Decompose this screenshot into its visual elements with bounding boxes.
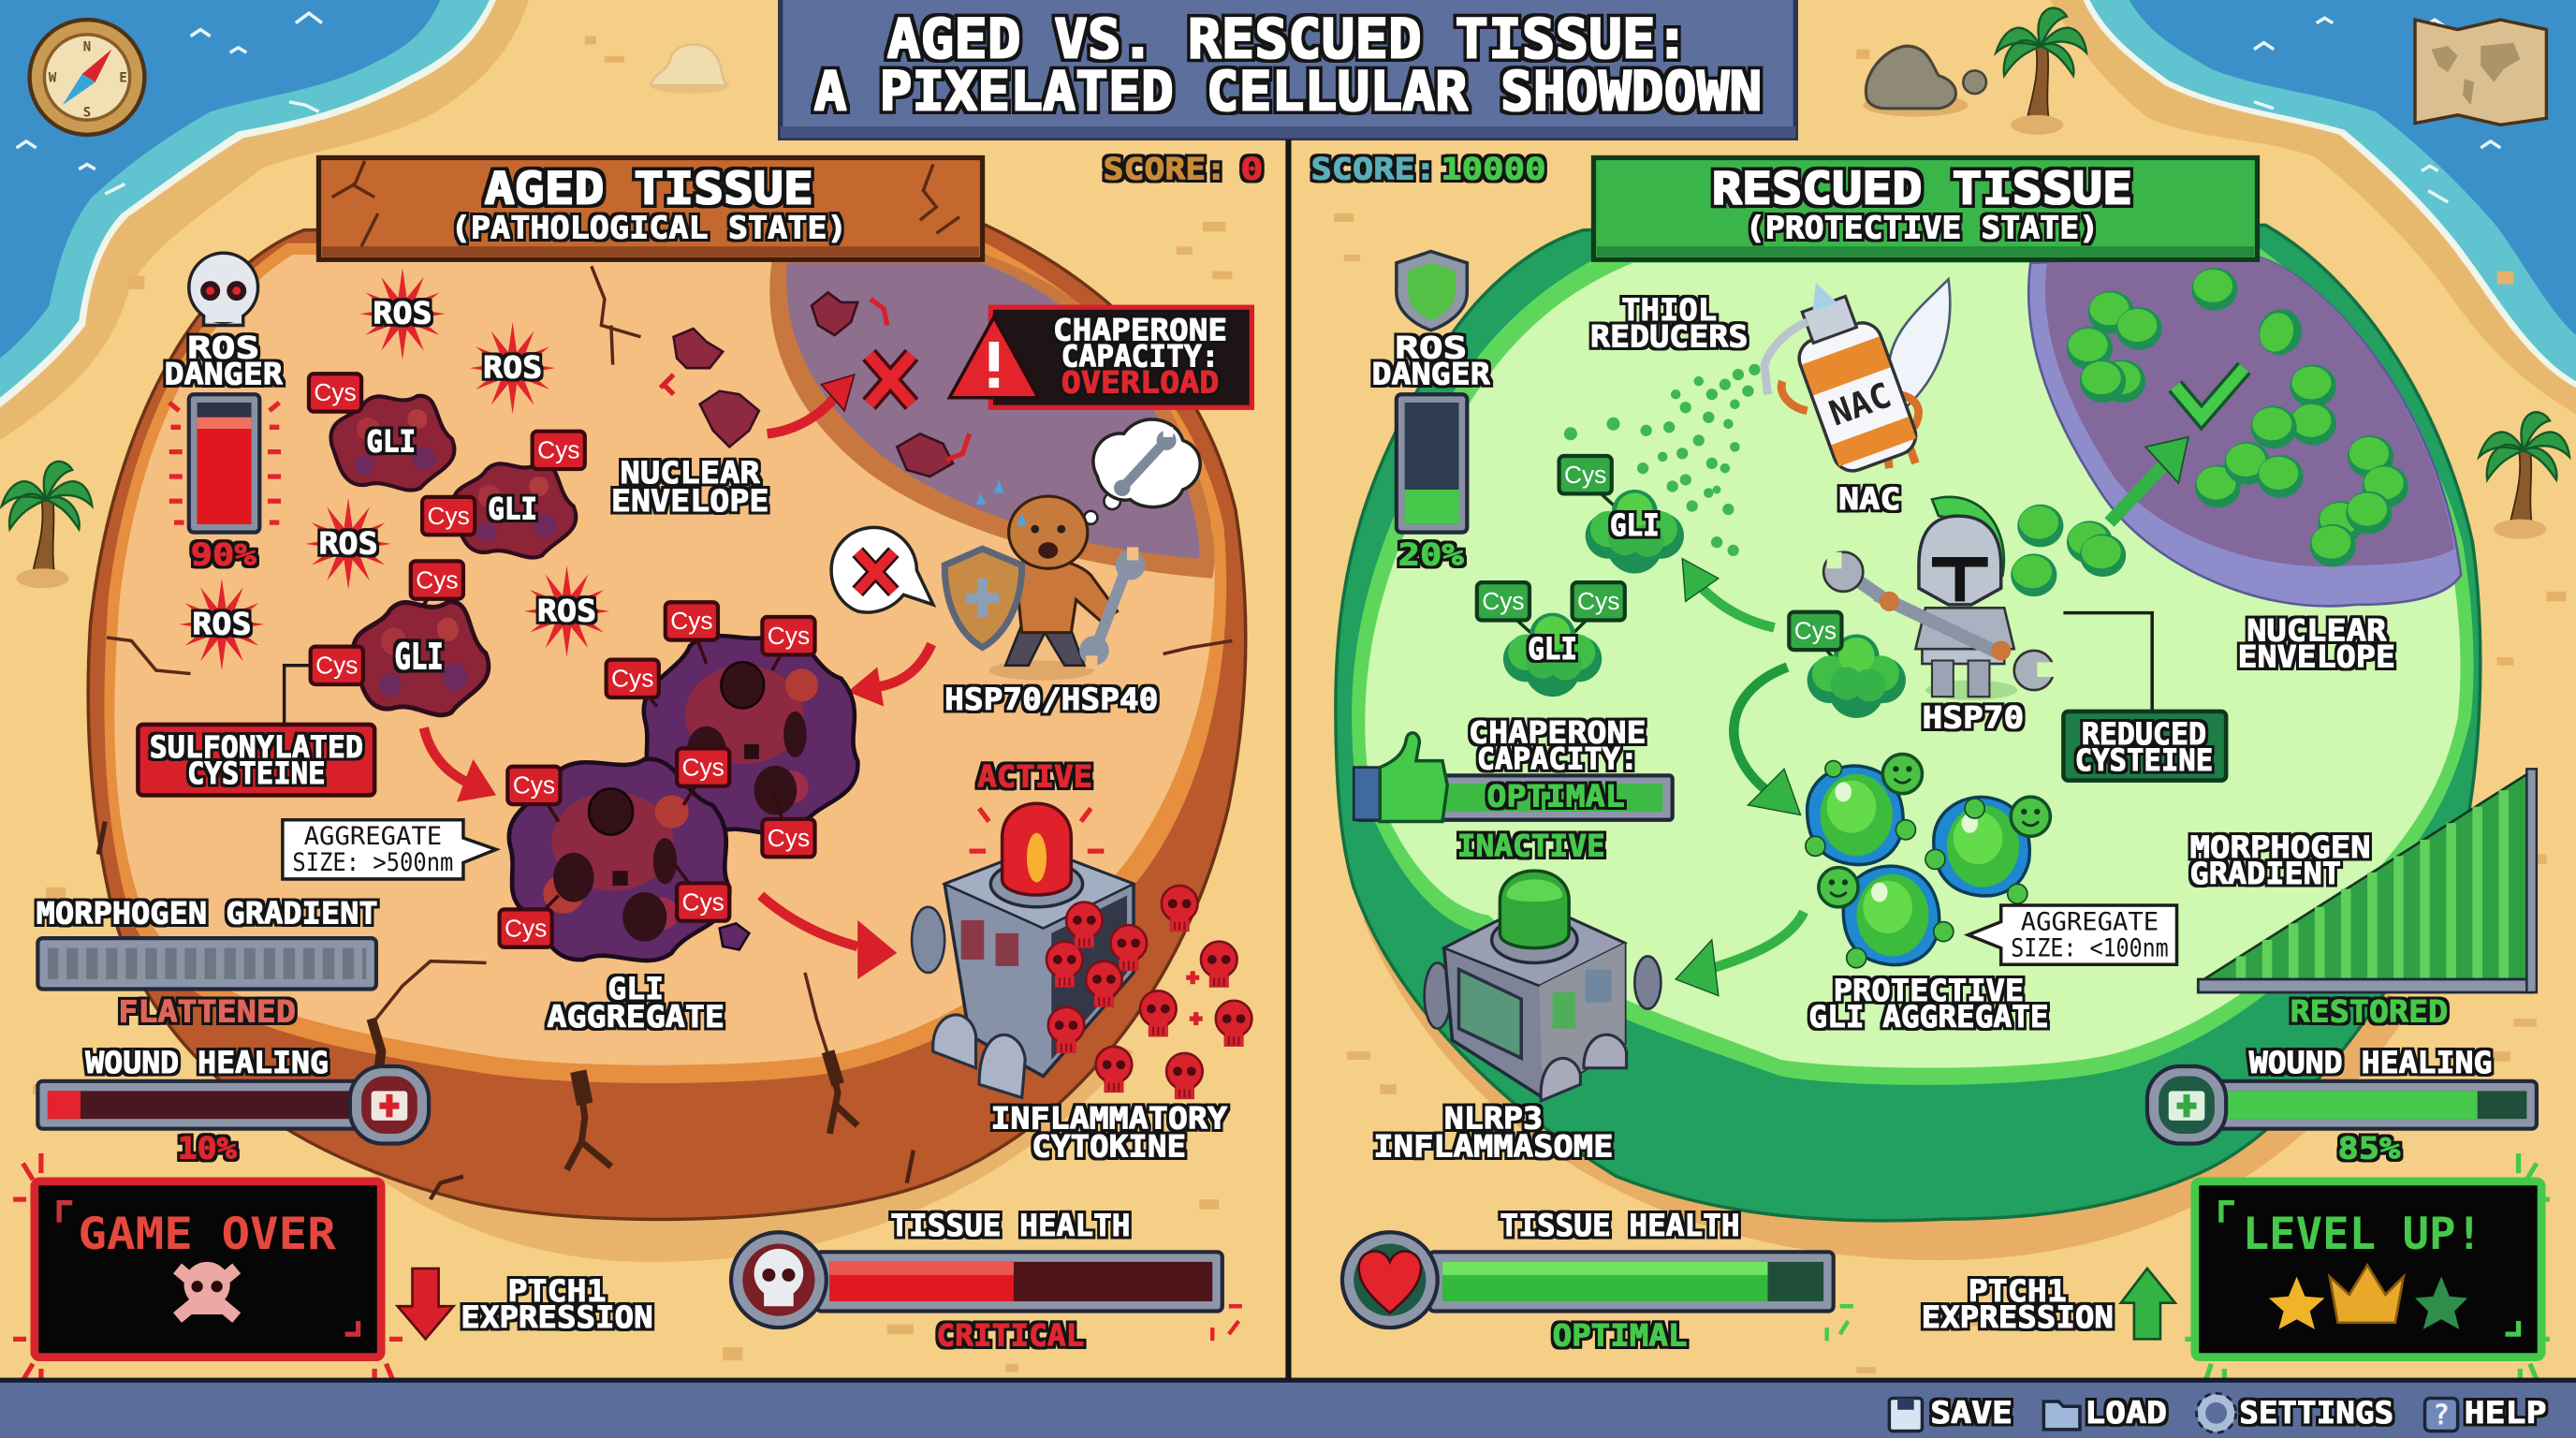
chaperone overload alert: OVERLOAD <box>1061 366 1219 400</box>
heading: rescued tissue banner: RESCUED TISSUE <box>1712 164 2132 215</box>
label: nlrp3 inflammasome: INFLAMMASOME <box>1373 1131 1614 1165</box>
callout: aggregate size small <box>1969 905 2177 964</box>
level up panel: LEVEL UP! <box>2243 1209 2482 1260</box>
callout: aggregate size large: AGGREGATE <box>304 823 442 851</box>
help button <box>2425 1397 2546 1432</box>
save button <box>1889 1397 2012 1431</box>
wound healing bar aged: 10% <box>178 1132 237 1166</box>
wound healing bar rescued: WOUND HEALING <box>2249 1047 2492 1080</box>
panel: aged tissue <box>88 225 1246 1262</box>
ros bursts: ROS <box>318 527 378 561</box>
large gli aggregates: Cys <box>768 824 810 852</box>
callout: aggregate size small: AGGREGATE <box>2021 908 2159 936</box>
game over panel <box>13 1153 402 1388</box>
reduced cysteine label <box>2063 613 2226 781</box>
label: thiol reducers: REDUCERS <box>1590 320 1748 354</box>
label: gli aggregate: AGGREGATE <box>547 1001 724 1034</box>
icon: treasure map <box>2415 20 2546 125</box>
heading: aged tissue banner <box>318 157 983 259</box>
load button: LOAD <box>2085 1397 2167 1431</box>
icon: grey rocks right <box>1863 46 1986 117</box>
arrow: aggregate to inflammasome <box>761 895 897 979</box>
heading: rescued tissue banner: (PROTECTIVE STATE) <box>1746 209 2099 245</box>
protective gli spheres <box>1806 755 2050 968</box>
game over panel: GAME OVER <box>78 1209 336 1260</box>
icon: compass: N <box>83 39 91 54</box>
large gli aggregates: Cys <box>768 622 810 650</box>
nuclear envelope label aged: ENVELOPE <box>611 485 768 519</box>
cell outer wall <box>88 225 1246 1219</box>
tissue health bar rescued: OPTIMAL <box>1553 1319 1687 1353</box>
title banner <box>781 0 1795 138</box>
label: ros danger rescued <box>1372 332 1491 392</box>
label: nlrp3 inflammasome: NLRP3 <box>1444 1103 1543 1137</box>
label: ros danger aged: ROS <box>187 332 259 366</box>
label: inflammatory cytokine: INFLAMMATORY <box>990 1103 1227 1137</box>
morphogen gradient flattened: MORPHOGEN GRADIENT <box>37 897 378 931</box>
label: nac: NAC <box>1838 483 1901 517</box>
character: knight hsp70 <box>1823 497 2056 700</box>
gli clumps with sulfonylated tags: Cys <box>315 652 358 680</box>
arrow: chaperone to aggregate <box>848 644 931 707</box>
ros danger meter: aged <box>169 394 281 533</box>
cell interior <box>114 255 1215 1065</box>
bottom toolbar <box>0 1378 2576 1438</box>
gli clumps with sulfonylated tags: Cys <box>314 378 357 406</box>
morphogen gradient flattened: FLATTENED <box>118 996 296 1030</box>
sulfonylated cysteine label: SULFONYLATED <box>150 731 363 765</box>
callout: aggregate size large <box>283 820 496 879</box>
heading: rescued tissue banner <box>1593 157 2258 259</box>
chaperone overload alert: CHAPERONE <box>1053 314 1227 347</box>
score: aged: SCORE: <box>1104 153 1226 186</box>
arrow: gli to aggregate <box>424 727 496 801</box>
icon: green shield <box>1397 252 1467 330</box>
large gli aggregates: Cys <box>611 665 653 693</box>
ptch1 expression down: EXPRESSION <box>461 1301 653 1335</box>
nuclear envelope label aged <box>611 457 768 519</box>
score: aged: 0 <box>1240 153 1264 186</box>
gli clumps with sulfonylated tags <box>309 374 585 715</box>
ptch1 expression down <box>398 1269 653 1339</box>
x speech bubble <box>831 527 933 612</box>
nuclear blobs aged <box>661 292 970 477</box>
nuclear envelope label rescued <box>2237 614 2395 675</box>
inflammatory cytokine skulls <box>1046 886 1251 1099</box>
gli clumps green: Cys <box>1577 587 1619 615</box>
icon: nac spray bottle <box>1764 268 1950 477</box>
callout: aggregate size large: SIZE: >500nm <box>292 849 453 877</box>
icon: sand rock left <box>651 44 729 94</box>
label: ros danger aged <box>165 332 284 392</box>
tissue health bar aged: TISSUE HEALTH <box>890 1210 1131 1243</box>
large gli aggregates: Cys <box>513 771 555 800</box>
ptch1 expression up: PTCH1 <box>1969 1275 2067 1309</box>
large gli aggregates: Cys <box>682 888 724 916</box>
title banner: A PIXELATED CELLULAR SHOWDOWN <box>814 60 1762 124</box>
level up panel <box>2185 1153 2550 1388</box>
tissue health bar aged <box>731 1210 1242 1353</box>
nuclear envelope label rescued: ENVELOPE <box>2237 641 2395 675</box>
chaperone capacity optimal <box>1354 716 1673 822</box>
thought bubble with wrench <box>1084 419 1200 524</box>
arrow: curve to protective aggregate <box>1734 668 1801 814</box>
gli clumps with sulfonylated tags: GLI <box>394 636 444 678</box>
icon: green check <box>2175 368 2244 418</box>
gli clumps green <box>1477 456 1906 718</box>
wound healing bar rescued <box>2147 1047 2537 1166</box>
arrow: to nlrp3 <box>1676 912 1804 996</box>
tissue health bar rescued: TISSUE HEALTH <box>1500 1210 1740 1243</box>
cracks <box>107 266 1232 1060</box>
gli clumps green: Cys <box>1482 587 1525 615</box>
settings button: SETTINGS <box>2239 1397 2393 1431</box>
arrow: hsp70 to gli <box>1682 559 1775 627</box>
cell outer wall <box>1336 225 2481 1221</box>
tissue health bar rescued <box>1342 1210 1853 1353</box>
wound healing bar aged: WOUND HEALING <box>85 1047 329 1080</box>
wall cracks <box>98 822 914 1199</box>
label: ros danger aged: DANGER <box>165 359 284 392</box>
reduced cysteine label: CYSTEINE <box>2075 744 2213 778</box>
morphogen gradient restored: RESTORED <box>2291 996 2448 1030</box>
arrow into nucleus blocked <box>768 374 855 433</box>
label: inflammatory cytokine <box>990 1103 1227 1165</box>
callout: aggregate size small: SIZE: <100nm <box>2011 934 2169 962</box>
cell orange rim <box>104 243 1226 1083</box>
cell shadow <box>1364 888 2415 1260</box>
score: rescued: SCORE: <box>1311 153 1436 186</box>
large gli aggregates: Cys <box>670 607 713 635</box>
gli clumps with sulfonylated tags: Cys <box>537 436 579 464</box>
icon: ros danger skull <box>189 253 258 325</box>
label: protective gli aggregate: GLI AGGREGATE <box>1808 1001 2049 1034</box>
gli clumps with sulfonylated tags: GLI <box>366 426 416 460</box>
ros danger meter rescued <box>1397 394 1467 533</box>
left ocean shoreline <box>0 0 529 440</box>
large gli aggregates <box>500 602 857 961</box>
nucleus <box>769 255 1214 579</box>
label: gli aggregate <box>547 973 724 1034</box>
free green blobs near knight <box>2011 505 2126 596</box>
wound healing bar aged <box>37 1047 429 1166</box>
label: hsp70/hsp40: HSP70/HSP40 <box>944 683 1158 717</box>
panel: rescued tissue <box>1336 225 2481 1260</box>
ptch1 expression up <box>1922 1269 2175 1339</box>
icon: top palm tree <box>1996 8 2086 135</box>
label: thiol reducers: THIOL <box>1621 294 1717 328</box>
score: aged <box>1104 153 1264 186</box>
nucleus rescued <box>2045 255 2454 566</box>
icon: compass <box>30 20 144 135</box>
label: protective gli aggregate <box>1808 975 2049 1034</box>
ptch1 expression down: PTCH1 <box>507 1275 607 1309</box>
arrow: into nucleus rescued <box>2110 437 2188 522</box>
label: ros danger rescued: DANGER <box>1372 359 1491 392</box>
sulfonylated cysteine label: CYSTEINE <box>187 757 326 791</box>
save button: SAVE <box>1930 1397 2012 1431</box>
chaperone overload alert: CAPACITY: <box>1061 340 1219 374</box>
ros bursts: ROS <box>483 352 542 386</box>
ros bursts: ROS <box>373 298 432 331</box>
wound healing bar rescued: 85% <box>2338 1132 2400 1166</box>
gli clumps green: Cys <box>1794 617 1837 645</box>
load button <box>2043 1397 2167 1431</box>
sulfonylated cysteine label <box>138 666 374 795</box>
chaperone capacity optimal: CAPACITY: <box>1477 742 1638 776</box>
value: 20 percent: 20% <box>1398 539 1464 573</box>
gli clumps green: GLI <box>1610 509 1660 543</box>
title banner: AGED VS. RESCUED TISSUE: <box>887 7 1689 70</box>
inflammasome inactive machine <box>1425 871 1661 1101</box>
help button: HELP <box>2465 1397 2546 1431</box>
gli clumps green: GLI <box>1528 633 1577 667</box>
large gli aggregates: Cys <box>682 753 724 781</box>
large gli aggregates: Cys <box>505 914 547 942</box>
morphogen gradient restored: GRADIENT <box>2190 858 2341 891</box>
heading: aged tissue banner: (PATHOLOGICAL STATE) <box>451 209 847 245</box>
icon: compass: E <box>119 71 127 86</box>
settings button <box>2197 1393 2393 1432</box>
ros bursts: ROS <box>537 594 596 628</box>
value: 90 percent: 90% <box>191 539 256 573</box>
icon: compass: W <box>49 71 57 86</box>
gli clumps with sulfonylated tags: GLI <box>488 493 537 527</box>
status: active: ACTIVE <box>977 761 1092 795</box>
chaperone overload alert <box>949 307 1251 407</box>
score: rescued: 10000 <box>1441 153 1546 186</box>
gli clumps with sulfonylated tags: Cys <box>416 565 459 594</box>
nuclear envelope label aged: NUCLEAR <box>621 457 761 491</box>
chaperone capacity optimal: CHAPERONE <box>1469 716 1647 750</box>
ptch1 expression up: EXPRESSION <box>1922 1301 2114 1335</box>
spray particles <box>1564 364 1761 556</box>
morphogen gradient restored <box>2190 769 2537 1030</box>
label: nlrp3 inflammasome <box>1373 1103 1614 1165</box>
cell interior <box>1365 263 2460 1068</box>
cell light rim <box>1352 246 2474 1085</box>
nuclear envelope label rescued: NUCLEAR <box>2247 614 2387 648</box>
character: stressed hsp70/hsp40 <box>944 479 1145 681</box>
label: hsp70: HSP70 <box>1922 701 2024 735</box>
chaperone capacity optimal: OPTIMAL <box>1486 781 1625 814</box>
cell shadow <box>230 969 1134 1262</box>
label: thiol reducers <box>1590 294 1748 354</box>
icon: left palm tree <box>2 462 92 588</box>
heading: aged tissue banner: AGED TISSUE <box>485 164 813 215</box>
gli clumps green: Cys <box>1564 461 1606 489</box>
label: protective gli aggregate: PROTECTIVE <box>1834 975 2024 1008</box>
label: ros danger rescued: ROS <box>1395 332 1467 366</box>
icon: red x <box>869 355 912 404</box>
status: inactive: INACTIVE <box>1457 829 1605 863</box>
ros bursts <box>179 268 609 670</box>
ros bursts: ROS <box>192 608 252 641</box>
gli clumps with sulfonylated tags: Cys <box>427 502 470 530</box>
score: rescued <box>1311 153 1546 186</box>
label: gli aggregate: GLI <box>607 973 664 1006</box>
help button: ? <box>2433 1400 2450 1432</box>
reduced cysteine label: REDUCED <box>2082 718 2206 752</box>
icon: nac spray bottle: NAC <box>1824 374 1896 434</box>
label: inflammatory cytokine: CYTOKINE <box>1032 1131 1186 1165</box>
nucleus rescued rim <box>2028 255 2461 606</box>
panel divider <box>1285 139 1292 1382</box>
inflammasome active machine <box>912 803 1134 1097</box>
icon: right palm tree <box>2479 412 2569 539</box>
right ocean shoreline <box>2050 0 2576 414</box>
tissue health bar aged: CRITICAL <box>936 1319 1084 1353</box>
green blobs in nucleus <box>2067 268 2408 566</box>
morphogen gradient flattened <box>37 897 378 1030</box>
icon: compass: S <box>83 106 91 121</box>
morphogen gradient restored: MORPHOGEN <box>2190 831 2371 865</box>
